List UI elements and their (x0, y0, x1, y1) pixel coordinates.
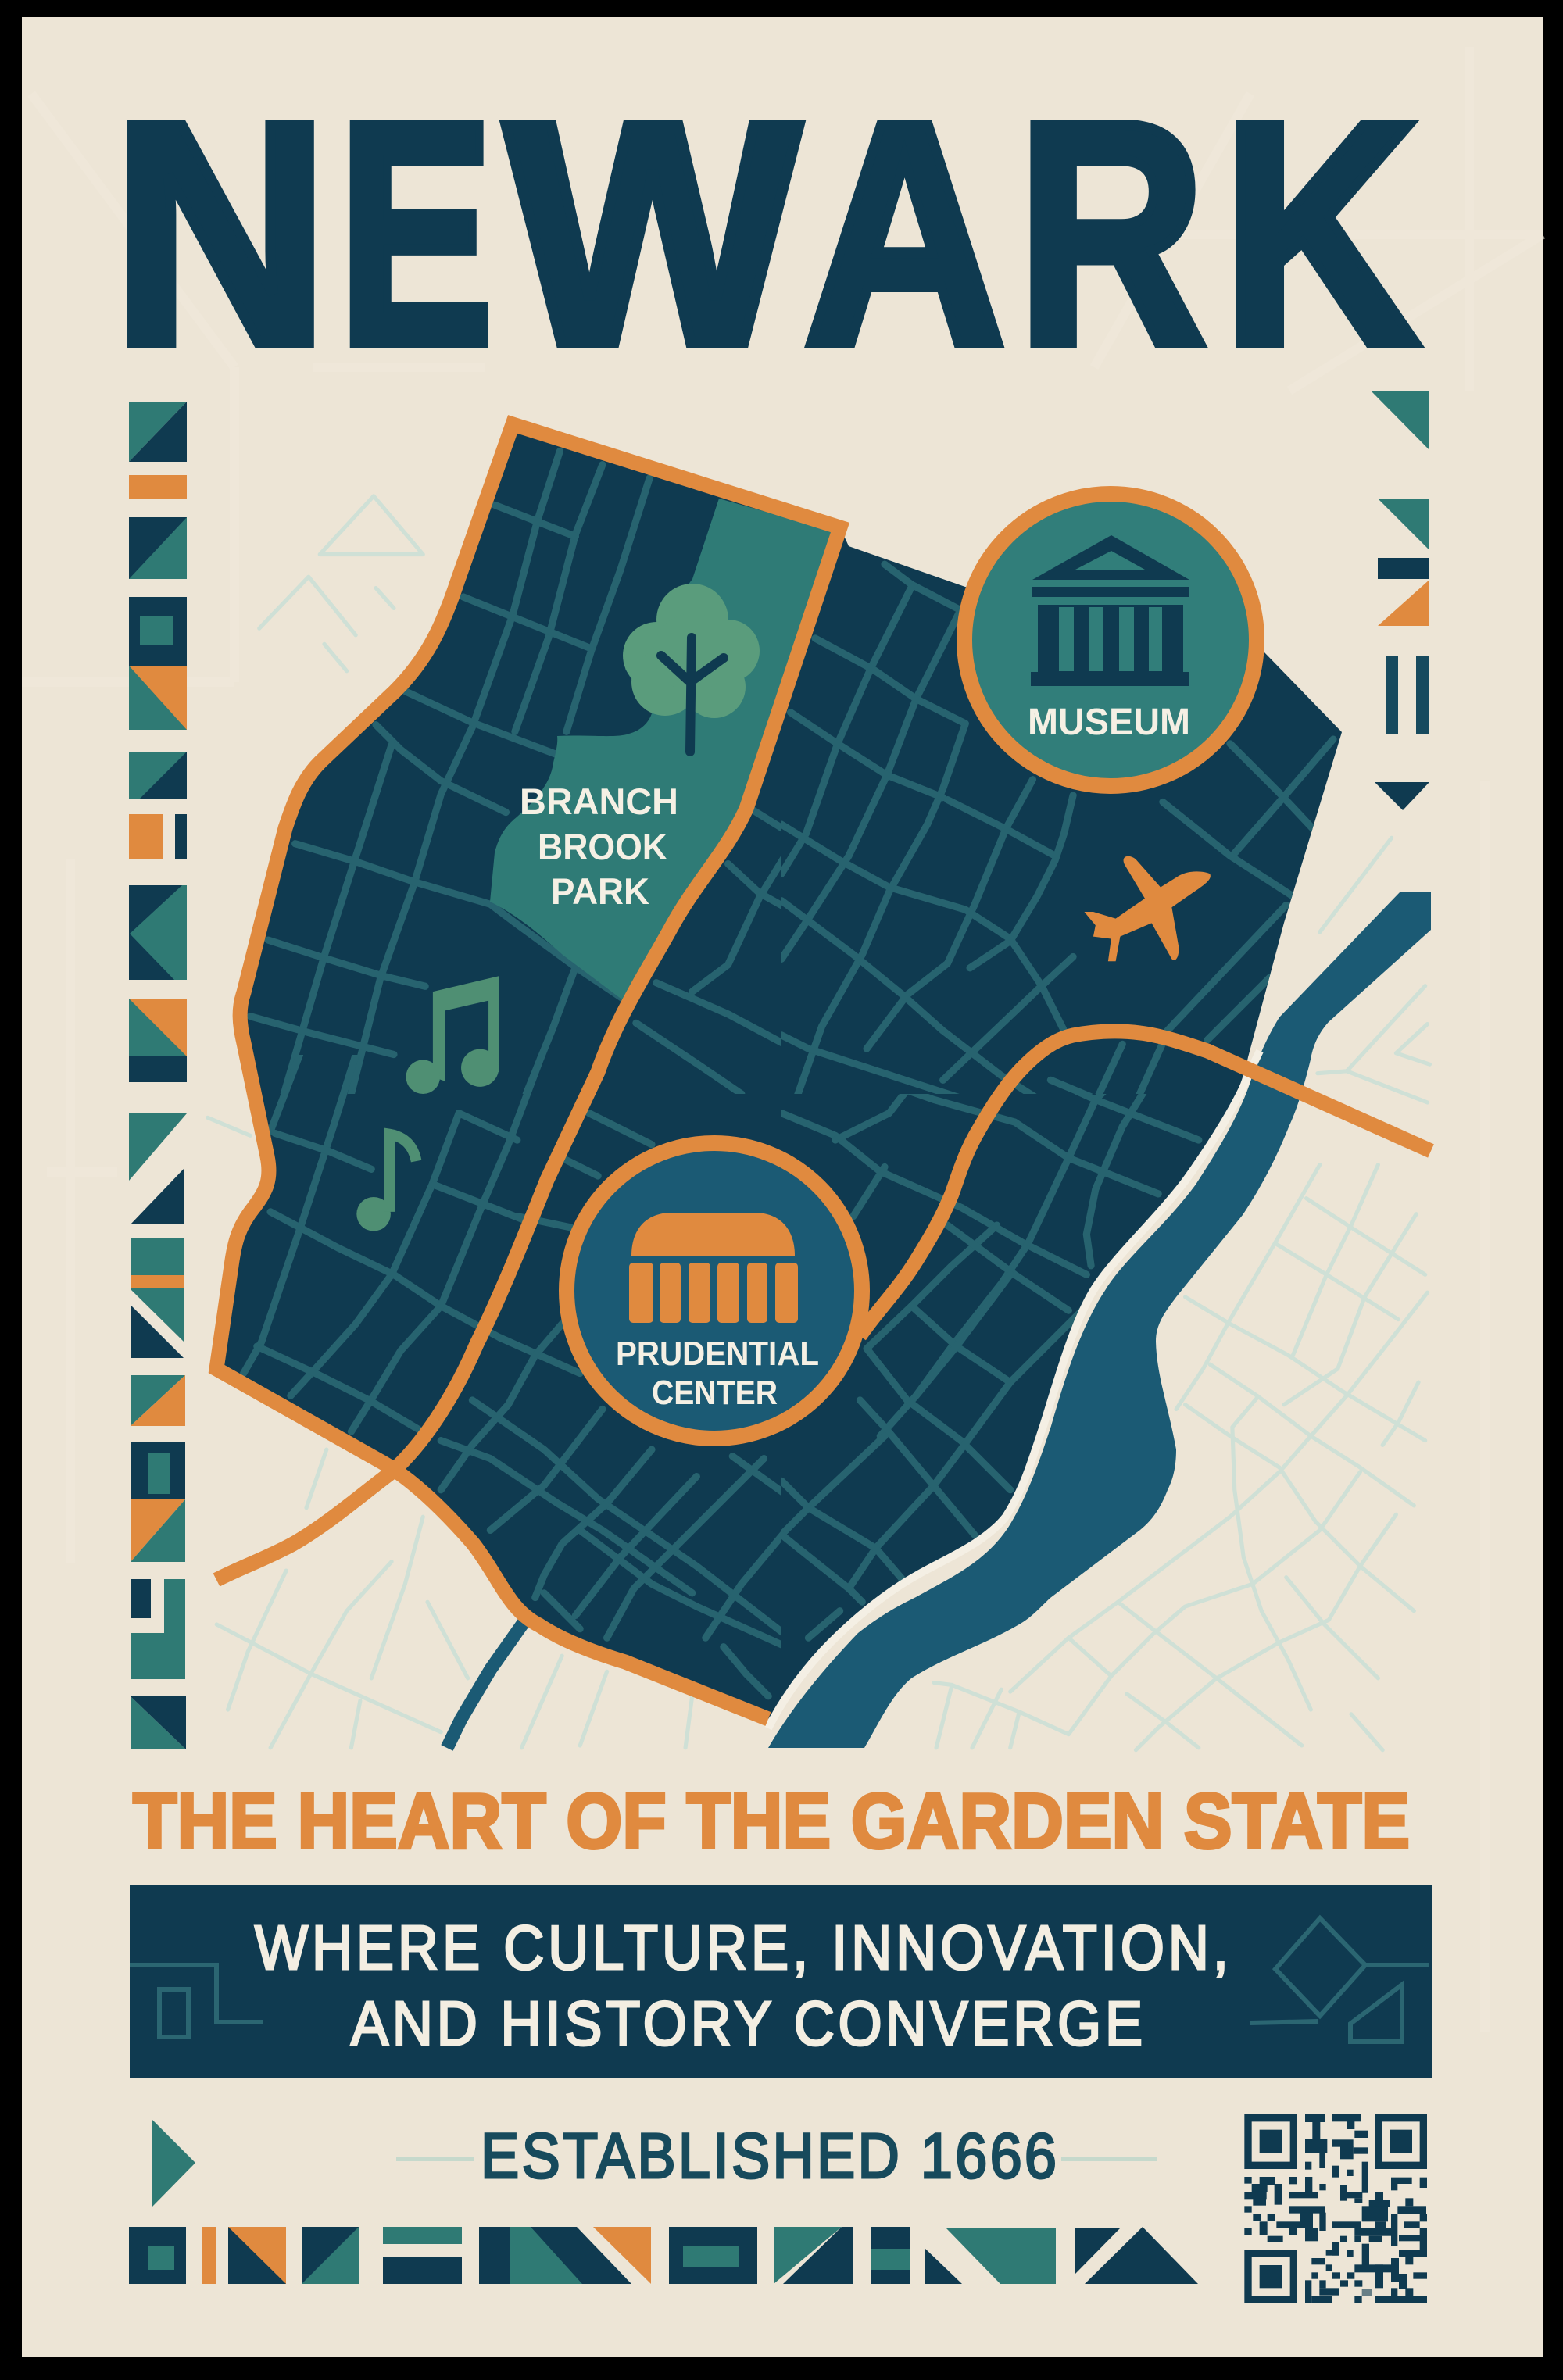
city map base (216, 424, 1342, 1719)
label: Branch Brook Park: BRANCH (520, 781, 678, 822)
orange highway route (216, 424, 1431, 1719)
left geometric column (129, 402, 187, 1749)
faint surrounding streets (208, 496, 1429, 1750)
label: Prudential Center (616, 1335, 819, 1412)
label: Museum: MUSEUM (1028, 702, 1190, 743)
title: W (506, 56, 803, 409)
title: K (1222, 56, 1418, 409)
banner (130, 1885, 1432, 2078)
label: Branch Brook Park: BROOK (538, 826, 667, 867)
tributary (447, 1616, 528, 1748)
title: E (338, 56, 493, 409)
subtitle: THE HEART OF THE GARDEN STATE (133, 1778, 1410, 1865)
icon: museum building (1031, 535, 1189, 686)
callout: Prudential Center (567, 1143, 862, 1438)
label: Branch Brook Park: PARK (551, 870, 649, 912)
title: R (1018, 56, 1205, 409)
label: Branch Brook Park (520, 781, 678, 912)
street grid (244, 451, 1333, 1696)
QR code (1244, 2114, 1427, 2303)
tagline: WHERE CULTURE, INNOVATION, (255, 1914, 1229, 1983)
icon: tree (623, 584, 760, 752)
tagline: AND HISTORY CONVERGE (351, 1989, 1143, 2059)
river (768, 892, 1431, 1748)
callout: Museum (964, 494, 1257, 786)
right geometric column (1372, 391, 1429, 810)
established: ESTABLISHED 1666 (481, 2119, 1057, 2192)
panel: Branch Brook Park (490, 499, 835, 1000)
icon: plane (1084, 856, 1211, 961)
tagline (255, 1914, 1229, 2059)
title: A (804, 56, 1005, 409)
icon: arena (629, 1213, 798, 1323)
river bank stripe (768, 1051, 1260, 1728)
icon: music notes (356, 976, 499, 1231)
label: Prudential Center: CENTER (652, 1374, 778, 1412)
title: N (113, 56, 329, 409)
play triangle (152, 2119, 195, 2207)
bottom geometric strip (129, 2227, 1198, 2284)
label: Prudential Center: PRUDENTIAL (616, 1335, 819, 1373)
